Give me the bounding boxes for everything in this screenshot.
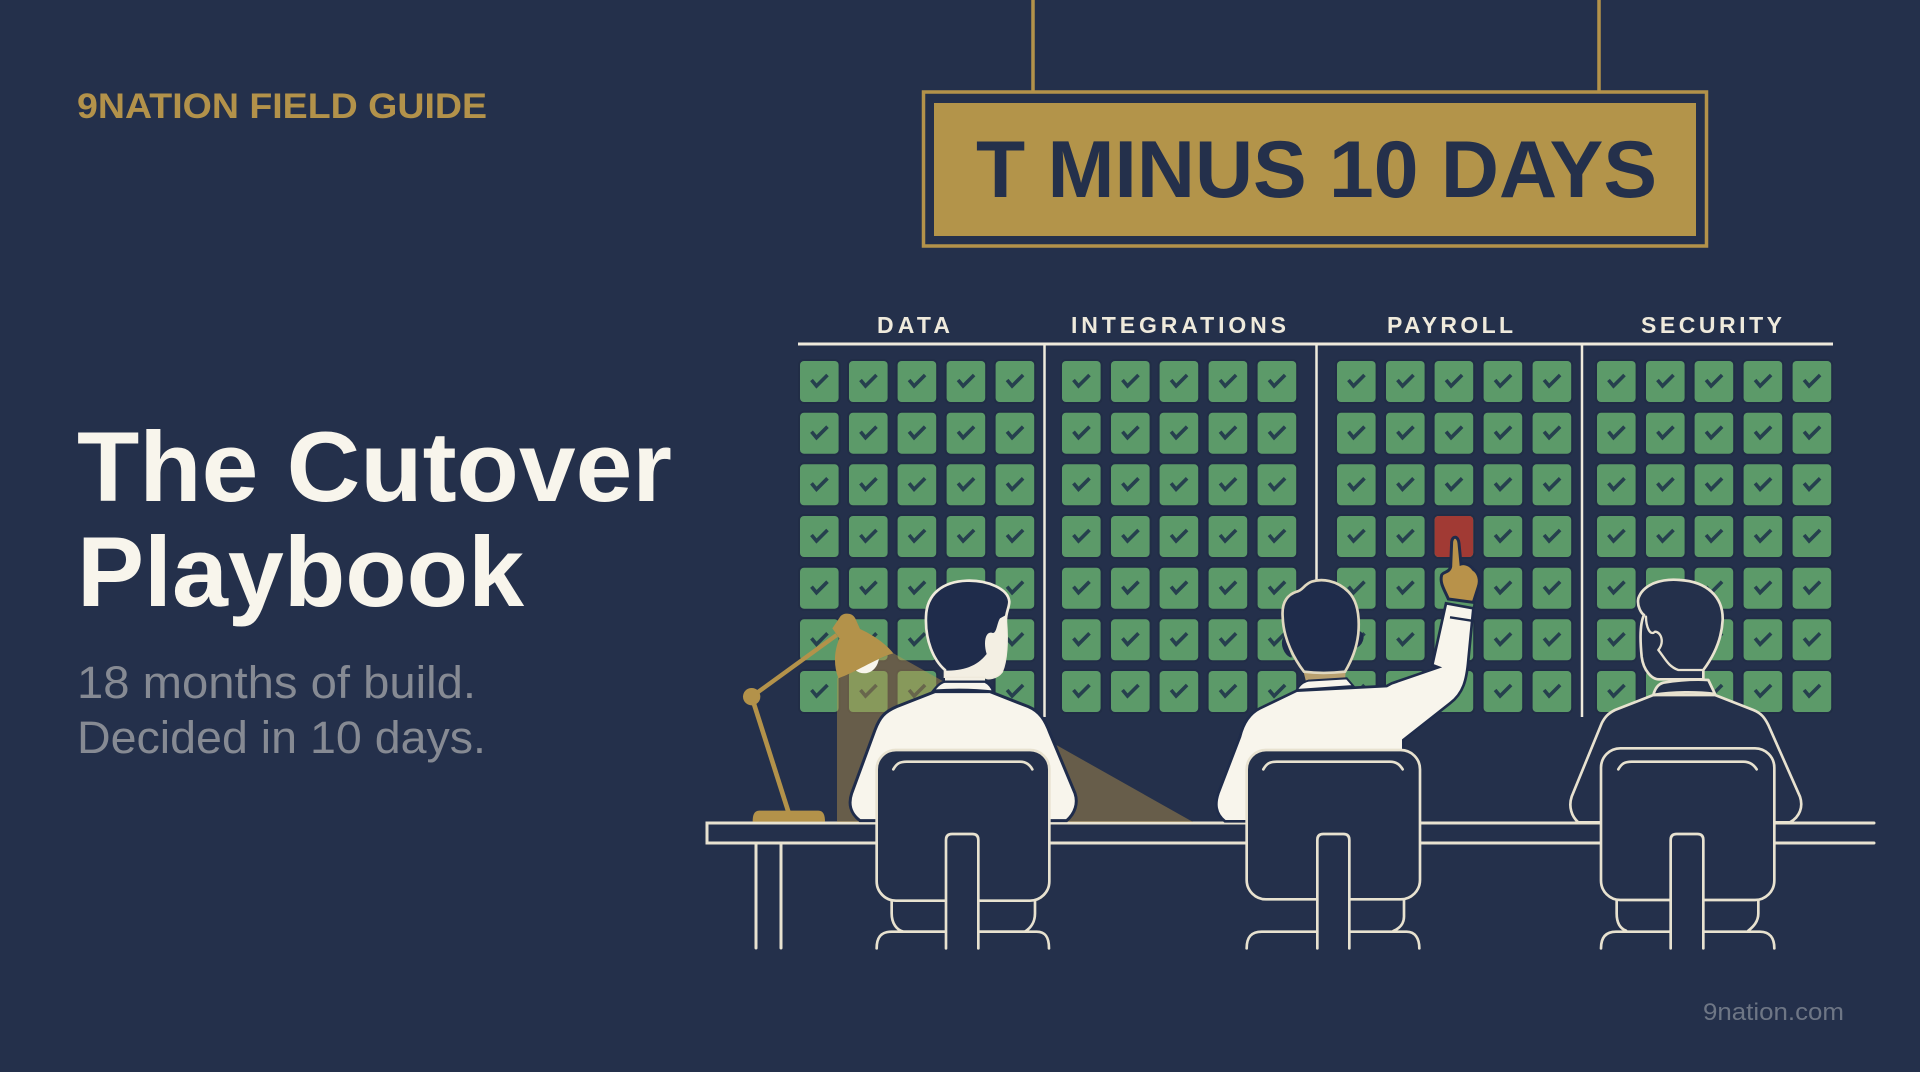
subtitle: 18 months of build.: [77, 657, 476, 708]
person 1 face: [945, 615, 1007, 678]
subtitle: Decided in 10 days.: [77, 712, 486, 763]
person 2 head: [1283, 580, 1359, 673]
column labels: [877, 312, 1782, 338]
red failing item: [1435, 516, 1473, 557]
column labels: INTEGRATIONS: [1071, 312, 1286, 338]
column: security checks: [1595, 359, 1833, 714]
person 1: seated left: [850, 581, 1076, 948]
person 2 ears: [1283, 632, 1363, 657]
column: data checks: [798, 359, 1036, 714]
person 3 face detail: [1646, 617, 1703, 670]
hanging sign: T MINUS 10 DAYS: T MINUS 10 DAYS: [976, 125, 1657, 215]
hanging sign: T MINUS 10 DAYS: [924, 0, 1706, 246]
person 2 chair: [1247, 750, 1420, 948]
lamp light beam: [837, 653, 1193, 822]
person 2 cuff line: [1450, 617, 1472, 621]
person 1 head: [926, 581, 1009, 678]
status board: [798, 344, 1833, 717]
footer: 9nation.com: 9nation.com: [1703, 999, 1844, 1026]
desk lamp: [743, 614, 893, 822]
desk: [707, 823, 1874, 948]
column labels: SECURITY: [1641, 312, 1782, 338]
person 3 torso: [1570, 695, 1801, 822]
person 3: seated right, outline only: [1570, 580, 1801, 948]
title: The Cutover Playbook: Playbook: [77, 516, 525, 627]
person 3 chair: [1601, 748, 1774, 948]
person 2 shirt and raised arm: [1216, 603, 1473, 821]
subtitle: [77, 657, 486, 763]
person 3 head: [1638, 580, 1723, 679]
person 2 hand: [1441, 537, 1479, 602]
person 3 collar: [1653, 680, 1715, 695]
title: The Cutover Playbook: [77, 411, 672, 627]
column: integrations checks: [1060, 359, 1298, 714]
eyebrow: 9NATION FIELD GUIDE: 9NATION FIELD GUIDE: [77, 87, 487, 126]
person 1 chair: [877, 750, 1049, 948]
person 1 neck: [945, 673, 985, 683]
column labels: PAYROLL: [1387, 312, 1513, 338]
person 2 collar: [1297, 678, 1353, 690]
column labels: DATA: [877, 312, 950, 338]
title: The Cutover Playbook: The Cutover: [77, 411, 672, 522]
column: payroll checks: [1335, 359, 1573, 714]
person 2 neck: [1303, 671, 1346, 682]
person 1 collar: [933, 682, 993, 692]
person 1 shirt: [850, 692, 1076, 821]
person 2: pointing at red item: [1216, 537, 1479, 948]
